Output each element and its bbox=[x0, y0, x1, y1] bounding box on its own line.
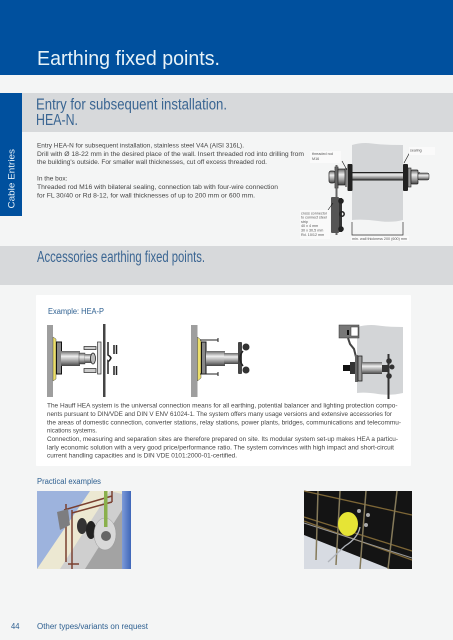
product description text: Threaded rod M16 with bilateral sealing, connection tab with four-wire connection bbox=[37, 184, 278, 191]
technical drawing: HEA-N threaded rod through wall bbox=[300, 143, 435, 241]
product description text: the building's outside. For smaller wall thicknesses, cut off excess threaded rod. bbox=[37, 159, 267, 166]
drawing labels: 40 x 4 mm bbox=[301, 224, 318, 228]
diagram 1: fixed point with strip clamp bbox=[47, 324, 116, 397]
side tab: Cable Entries bbox=[0, 93, 22, 216]
drawing labels: cross connector bbox=[301, 212, 328, 216]
photo: wall installation illustration bbox=[37, 491, 131, 569]
drawing labels: M16 bbox=[312, 157, 319, 161]
system description text: current handling capacities and is DIN VDE 0101:2000-01-certified. bbox=[47, 452, 237, 460]
heading band: Accessories bbox=[0, 246, 453, 285]
heading band: Entry for subsequent installation bbox=[22, 93, 453, 132]
system description text: the areas of domestic connection, converter stations, relay stations, power plants, bridges, communications and telecommu- bbox=[47, 419, 401, 426]
header band bbox=[0, 0, 453, 75]
drawing labels: 30 x 30,5 mm bbox=[301, 228, 323, 232]
product description text: In the box: bbox=[37, 176, 68, 182]
photo: site installation on rebar bbox=[304, 491, 412, 569]
system description text: The Hauff HEA system is the universal connection means for all earthing, potential balancer and lighting protection compo- bbox=[47, 403, 398, 410]
product description text: Entry HEA-N for subsequent installation, stainless steel V4A (AISI 316L). bbox=[37, 142, 244, 149]
heading band: Entry for subsequent installation: HEA-N. bbox=[36, 112, 78, 129]
side tab: Cable Entries: Cable Entries bbox=[6, 149, 18, 208]
product description text bbox=[37, 142, 304, 199]
subheading: Practical examples: Practical examples bbox=[37, 477, 101, 486]
diagram 2: fixed point assembled bbox=[191, 325, 250, 397]
system description text: Connection, measuring and separation sites are therefore prepared on site. Its modular system set-up makes HEA a particu- bbox=[47, 436, 398, 443]
panel: Example HEA-P bbox=[36, 295, 411, 466]
drawing labels bbox=[300, 147, 435, 241]
drawing labels: to connect steel bbox=[301, 216, 327, 220]
subheading: Example: Example: HEA-P bbox=[48, 307, 104, 316]
system description text bbox=[47, 403, 401, 460]
title: Earthing fixed points. bbox=[37, 48, 220, 70]
footer note: Other types/variants on request bbox=[37, 622, 149, 631]
drawing labels: Rd. 10/12 mm bbox=[301, 233, 324, 237]
diagram 3: fixed point with connection box bbox=[339, 325, 403, 399]
drawing labels: threaded rod bbox=[312, 152, 333, 156]
heading band: Entry for subsequent installation: Entry for subsequent installation. bbox=[36, 96, 227, 114]
drawing labels: sealing bbox=[410, 148, 422, 152]
product description text: Drill with Ø 18-22 mm in the desired place of the wall. Insert threaded rod into drilling from bbox=[37, 151, 304, 158]
drawing labels: strip bbox=[301, 220, 308, 224]
system description text: larly economic solution with a very good price/performance ratio. The system convinces with high impact and short-circuit bbox=[47, 444, 394, 451]
drawing labels: min. wall thickness 200 (600) mm bbox=[352, 237, 407, 241]
page number: 44 bbox=[11, 622, 20, 631]
product description text: for FL 30/40 or Rd 8-12, for wall thicknesses of up to 200 mm or 600 mm. bbox=[37, 192, 255, 199]
system description text: nents pursuant to DIN/VDE and DIN V ENV 61024-1. The system offers many usage versions and extensive accessories for bbox=[47, 411, 393, 418]
system description text: nications systems. bbox=[47, 428, 97, 435]
heading band: Accessories: Accessories earthing fixed points. bbox=[37, 249, 205, 266]
